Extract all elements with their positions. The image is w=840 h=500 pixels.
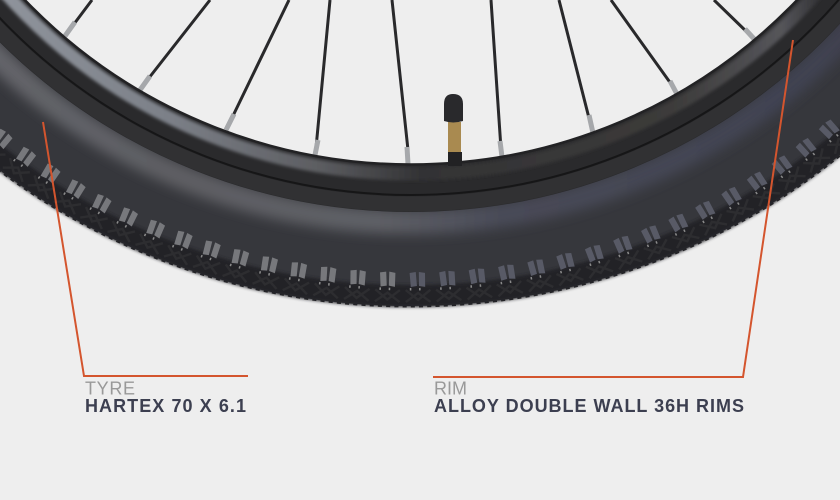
tread knobs left [0, 128, 395, 287]
tread band [0, 0, 840, 296]
callout label: tyre: TYRE [85, 378, 135, 398]
spoke nipples [65, 22, 756, 164]
callout label: rim [434, 378, 744, 416]
rim sheen [0, 0, 840, 174]
tyre rough outer edge [0, 0, 840, 305]
callout label: tyre [85, 378, 246, 416]
rim lower wall [0, 0, 840, 204]
callout label: rim: ALLOY DOUBLE WALL 36H RIMS [434, 396, 744, 416]
rim [0, 0, 840, 204]
rim inner edge [0, 0, 840, 164]
tread knobs right [410, 119, 840, 287]
spokes [65, 0, 756, 164]
callout line: rim [433, 40, 793, 377]
tyre [0, 0, 840, 305]
callout label: tyre: HARTEX 70 X 6.1 [85, 396, 246, 416]
tread blocks [0, 128, 840, 302]
icon: valve [444, 94, 463, 166]
rim grooves [0, 0, 840, 195]
tyre body [0, 0, 840, 250]
rim body [0, 0, 840, 188]
sidewall sheen [0, 0, 840, 222]
callout line: tyre [43, 122, 248, 376]
callout label: rim: RIM [434, 378, 467, 398]
